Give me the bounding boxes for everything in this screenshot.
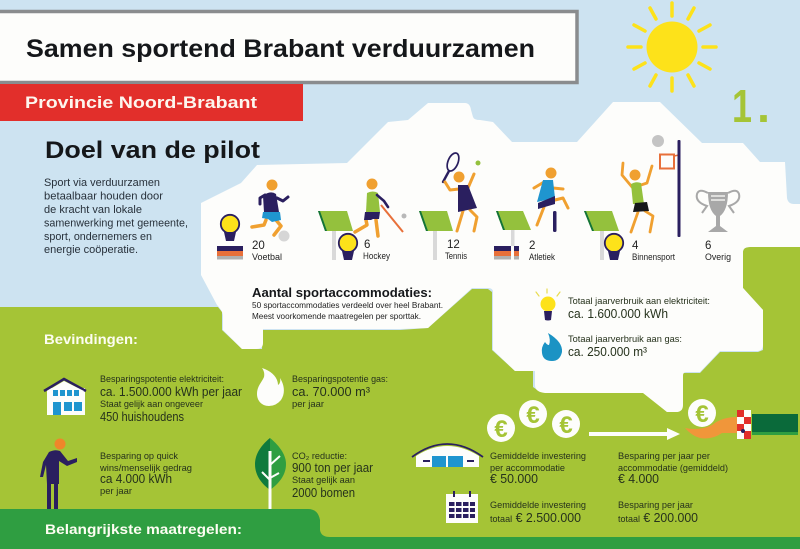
page number [732, 80, 770, 132]
dark green footer band [0, 509, 800, 549]
sport: indoor player with hoop [622, 135, 680, 237]
icons: euro coins: € [559, 412, 573, 439]
label: Atletiek: Atletiek [529, 252, 555, 262]
text block: number of sports facilities: 50 sportaccommodaties verdeeld over heel Brabant. [252, 300, 443, 310]
text: average annual savings: Besparing per jaar per [618, 451, 710, 462]
text block: number of sports facilities: Aantal sportaccommodaties: [252, 285, 432, 300]
icon: hand receiving coin: € [695, 401, 709, 428]
text: average annual savings: € 4.000 [618, 471, 659, 486]
sport: hockey player [355, 178, 406, 236]
text: total gas use [568, 334, 682, 359]
text block: number of sports facilities [252, 285, 443, 321]
heading: findings: Bevindingen: [44, 331, 138, 347]
label: Overig: Overig [705, 252, 731, 262]
label: Overig: 6 [705, 240, 711, 252]
text: total annual savings: Besparing per jaar [618, 500, 693, 511]
text block: goal description: Sport via verduurzamen [44, 177, 160, 189]
text: total investment: Gemiddelde investering [490, 500, 586, 511]
sport: football player [252, 180, 290, 242]
text: gas savings: ca. 70.000 m³ [292, 384, 371, 399]
text block: goal description: betaalbaar houden door [44, 190, 163, 202]
white cloud panel [201, 102, 800, 412]
label: Hockey [363, 239, 390, 261]
icon: measures strip football [217, 246, 243, 260]
icon: blue gas flame [542, 333, 562, 361]
icon: bulb indoor sport [605, 234, 623, 260]
solar panel 4 [584, 211, 619, 260]
text: quick wins: Besparing op quick [100, 451, 178, 462]
text: electricity savings [100, 374, 243, 424]
icon: house [44, 379, 86, 415]
text: quick wins: wins/menselijk gedrag [99, 463, 192, 474]
text: CO2 reduction [292, 451, 374, 500]
text: CO2 reduction: Staat gelijk aan [292, 475, 355, 486]
title box [0, 12, 577, 82]
icons: euro coins: € [494, 416, 508, 443]
label: Atletiek: 2 [529, 240, 535, 252]
icon: trophy [697, 191, 739, 232]
arrow [589, 428, 680, 440]
icon: calendar [446, 491, 478, 523]
text: average annual savings [618, 451, 728, 486]
text: electricity savings: Besparingspotentie elektriciteit: [100, 374, 224, 385]
red banner: Provincie Noord-Brabant [25, 93, 257, 112]
text block: goal description: energie coöperatie. [44, 244, 138, 256]
icon: light bulb hockey [339, 234, 357, 260]
text: quick wins: per jaar [100, 486, 132, 497]
icons: euro coins: € [526, 402, 540, 429]
label: Voetbal: Voetbal [252, 252, 282, 262]
icon: sports hall [412, 444, 483, 467]
text: average investment: per accommodatie [490, 463, 565, 474]
text block: goal description [44, 177, 188, 256]
text block: number of sports facilities: Meest voorkomende maatregelen per sporttak. [252, 311, 421, 321]
label: Atletiek [529, 240, 555, 262]
title box: Samen sportend Brabant verduurzamen [26, 35, 535, 63]
text: total electricity use: ca. 1.600.000 kWh [568, 306, 668, 321]
icon: standing person [40, 438, 77, 509]
icons: euro coins [487, 400, 580, 443]
icon: white flame [257, 368, 284, 406]
label: Hockey: 6 [364, 239, 370, 251]
text block: goal description: samenwerking met gemeente, [44, 218, 188, 230]
label: Voetbal: 20 [252, 240, 265, 252]
label: Tennis: Tennis [445, 251, 467, 261]
text: quick wins [99, 451, 192, 497]
icon: hand receiving coin [685, 399, 798, 439]
text: gas savings: Besparingspotentie gas: [292, 374, 388, 385]
text: quick wins: ca 4.000 kWh [100, 471, 172, 486]
text: electricity savings: 450 huishoudens [100, 409, 184, 424]
text: total annual savings: totaal € 200.000 [618, 510, 698, 525]
text: total electricity use [568, 296, 710, 321]
text: total electricity use: Totaal jaarverbruik aan elektriciteit: [568, 296, 710, 307]
solar panel 1 [318, 211, 353, 260]
text: CO2 reduction: 2000 bomen [292, 485, 355, 500]
label: Tennis: 12 [447, 239, 460, 251]
heading: goal of the pilot: Doel van de pilot [45, 137, 260, 164]
icon: lit bulb [536, 289, 560, 320]
text: gas savings: per jaar [292, 399, 324, 410]
label: Overig [705, 240, 731, 262]
heading: main measures: Belangrijkste maatregelen: [45, 521, 242, 537]
icon: leaf tree [255, 438, 286, 509]
text: total investment [490, 500, 586, 525]
page number: 1 [732, 80, 752, 132]
text: electricity savings: Staat gelijk aan ongeveer [100, 399, 203, 410]
label: Hockey: Hockey [363, 251, 390, 261]
text block: goal description: sport, ondernemers en [44, 231, 152, 243]
page number: . [757, 80, 770, 132]
sport: athlete over hurdle [534, 168, 568, 232]
label: Voetbal [252, 240, 282, 262]
icon: measures strip athletics [494, 246, 519, 260]
sport: tennis player [443, 151, 480, 231]
text: CO2 reduction: CO₂ reductie: [292, 451, 347, 462]
text: CO2 reduction: 900 ton per jaar [292, 460, 374, 475]
text: total gas use: Totaal jaarverbruik aan gas: [568, 334, 682, 345]
icon: sun [628, 3, 716, 91]
text: electricity savings: ca. 1.500.000 kWh per jaar [100, 384, 243, 399]
text: average investment [490, 451, 586, 486]
label: Binnensport: Binnensport [632, 252, 675, 262]
text: average annual savings: accommodatie (gemiddeld) [618, 463, 728, 474]
label: Tennis [445, 239, 467, 261]
text: total investment: totaal € 2.500.000 [490, 510, 581, 525]
red banner [0, 84, 303, 121]
sky and land: green field [0, 247, 800, 549]
solar panel 2 [419, 211, 453, 260]
icon: light bulb football [221, 215, 239, 241]
label: Binnensport: 4 [632, 240, 639, 252]
solar panel 3 [496, 211, 531, 250]
label: Binnensport [632, 240, 675, 262]
text: gas savings [292, 374, 388, 410]
text: average investment: Gemiddelde investering [490, 451, 586, 462]
text: total annual savings [618, 500, 698, 525]
text: average investment: € 50.000 [490, 471, 538, 486]
text block: goal description: de kracht van lokale [44, 204, 142, 216]
text: total gas use: ca. 250.000 m³ [568, 344, 648, 359]
